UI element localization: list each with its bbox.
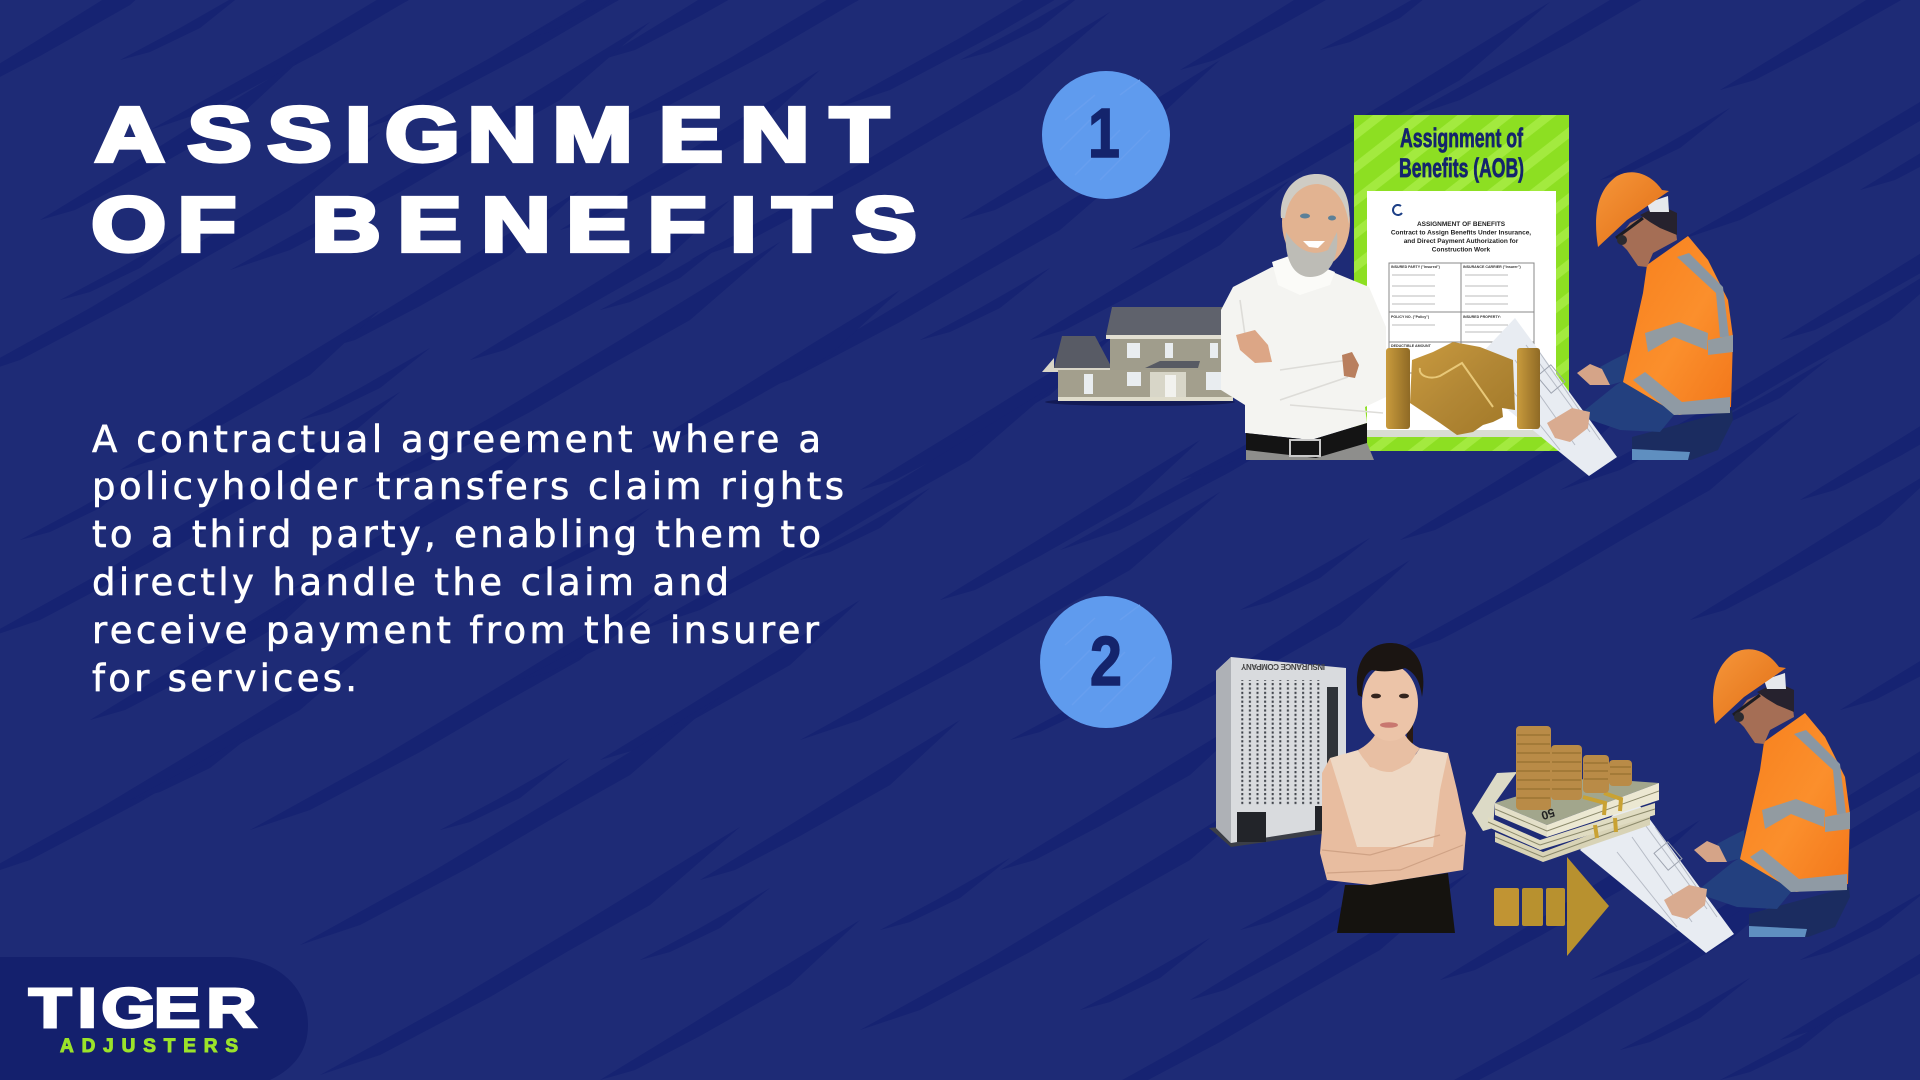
logo wordmark: TIGER xyxy=(29,978,257,1039)
person: construction worker with blueprint, second scene xyxy=(1580,649,1850,953)
body text: A contractual agreement where a xyxy=(92,418,821,461)
form paper: Contract to Assign Benefits Under Insurance, xyxy=(1391,230,1531,236)
title: OF BENEFITS xyxy=(91,182,917,268)
step 1 badge: 1 xyxy=(1088,94,1120,172)
form heading: Benefits (AOB) xyxy=(1399,153,1524,183)
form paper: Construction Work xyxy=(1432,246,1491,254)
person: woman with crossed arms xyxy=(1320,643,1466,933)
icon: house xyxy=(1042,307,1235,406)
form paper xyxy=(1367,191,1556,437)
form paper: DEDUCTIBLE AMOUNT xyxy=(1391,344,1432,348)
form paper: INSURED PARTY ("Insured") xyxy=(1391,265,1441,269)
title: ASSIGNMENT xyxy=(95,92,889,178)
form heading: Assignment of xyxy=(1400,123,1524,153)
person: smiling man with crossed arms xyxy=(1221,174,1386,460)
icon: insurance company building: INSURANCE COMPANY xyxy=(1240,662,1325,671)
form paper: INSURED PROPERTY: xyxy=(1463,315,1501,319)
body text: policyholder transfers claim rights xyxy=(92,465,844,508)
icon: money stack with coins: 50 xyxy=(1539,805,1557,823)
document: Assignment of Benefits form xyxy=(1354,115,1569,451)
body text: directly handle the claim and xyxy=(92,561,729,604)
form paper: and Direct Payment Authorization for xyxy=(1404,238,1519,245)
icon: money stack with coins xyxy=(1472,726,1659,862)
arrow: gold payment arrow xyxy=(1494,857,1609,956)
icon: insurance company building xyxy=(1209,657,1350,847)
body text: to a third party, enabling them to xyxy=(92,513,821,556)
body text: for services. xyxy=(92,657,357,700)
title xyxy=(91,92,917,268)
person: construction worker with blueprint xyxy=(1463,172,1733,476)
icon: gold handshake xyxy=(1386,342,1540,435)
step 2 badge xyxy=(1040,596,1172,728)
logo tagline: ADJUSTERS xyxy=(60,1036,238,1057)
form paper: POLICY NO. ("Policy") xyxy=(1391,315,1430,319)
form paper: ASSIGNMENT OF BENEFITS xyxy=(1417,221,1506,228)
step 1 badge xyxy=(1042,71,1170,199)
logo panel: Tiger Adjusters xyxy=(0,957,308,1080)
step 2 badge: 2 xyxy=(1090,622,1122,700)
form heading xyxy=(1399,123,1524,183)
body text xyxy=(92,418,844,700)
form paper: INSURANCE CARRIER ("Insurer") xyxy=(1463,265,1522,269)
body text: receive payment from the insurer xyxy=(92,609,820,652)
